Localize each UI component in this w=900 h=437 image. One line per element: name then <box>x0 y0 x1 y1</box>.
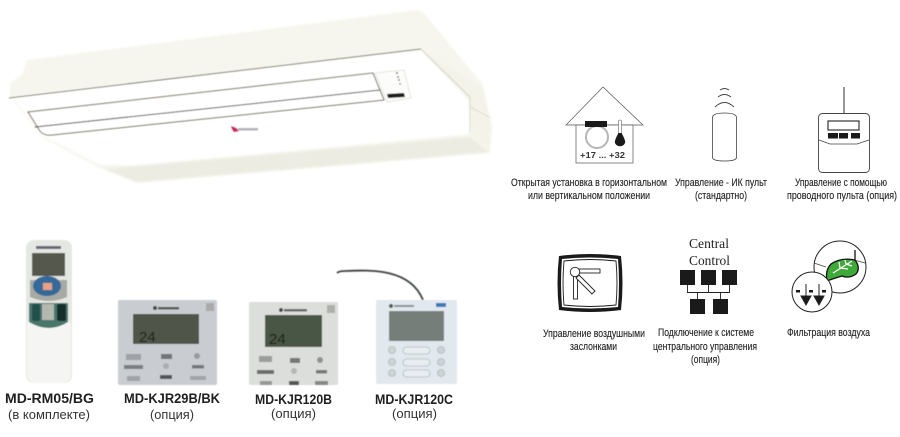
icon: infrared remote <box>712 88 737 161</box>
model label: MD-RM05/BG: MD-RM05/BG <box>5 391 94 406</box>
wired controller MD-KJR29B/BK photo: 24 <box>139 329 156 346</box>
icon: house with temperature range: +17 ... +32 <box>580 151 626 160</box>
model label: MD-KJR120B <box>255 392 332 421</box>
model label: MD-RM05/BG <box>5 391 94 422</box>
model label: MD-KJR29B/BK: (опция) <box>150 407 194 422</box>
wired controller MD-KJR120C with cable photo <box>337 271 457 384</box>
icon: air filtration <box>792 241 866 312</box>
wired controller MD-KJR29B/BK photo <box>118 300 217 385</box>
model label: MD-KJR120C: MD-KJR120C <box>375 392 453 407</box>
caption: IR remote line 2: (стандартно) <box>695 190 747 202</box>
model label: MD-RM05/BG: (в комплекте) <box>8 407 90 422</box>
air conditioner unit photo <box>9 10 492 183</box>
model label: MD-KJR120C <box>375 392 453 421</box>
remote control MD-RM05/BG photo <box>26 240 72 383</box>
model label: MD-KJR29B/BK: MD-KJR29B/BK <box>124 391 220 406</box>
caption: central control line 2: центрального управления <box>653 341 757 353</box>
caption: IR remote: Управление - ИК пульт <box>675 177 767 189</box>
icon: central control network: Central <box>689 236 729 251</box>
model label: MD-KJR120C: (опция) <box>392 406 437 421</box>
icon: house with temperature range <box>566 87 643 163</box>
caption: central control: Подключение к системе <box>658 327 754 339</box>
caption: louver control line 2: заслонками <box>570 341 617 353</box>
icon: wired controller <box>818 87 870 172</box>
caption: louver control: Управление воздушными <box>543 328 645 340</box>
caption: open installation: Открытая установка в горизонтальном <box>511 177 667 189</box>
wired controller MD-KJR120B photo: 24 <box>269 331 286 348</box>
wired controller MD-KJR120B photo <box>249 302 338 385</box>
caption: air filtration: Фильтрация воздуха <box>787 327 871 339</box>
caption: open installation line 2: или вертикальном положении <box>528 190 650 202</box>
model label: MD-KJR29B/BK <box>124 391 220 422</box>
icon: central control network: Control <box>689 253 730 268</box>
icon: louver control <box>558 254 622 312</box>
caption: central control line 3: (опция) <box>691 354 720 366</box>
model label: MD-KJR120B: (опция) <box>271 406 316 421</box>
model label: MD-KJR120B: MD-KJR120B <box>255 392 332 407</box>
icon: central control network <box>680 236 737 314</box>
